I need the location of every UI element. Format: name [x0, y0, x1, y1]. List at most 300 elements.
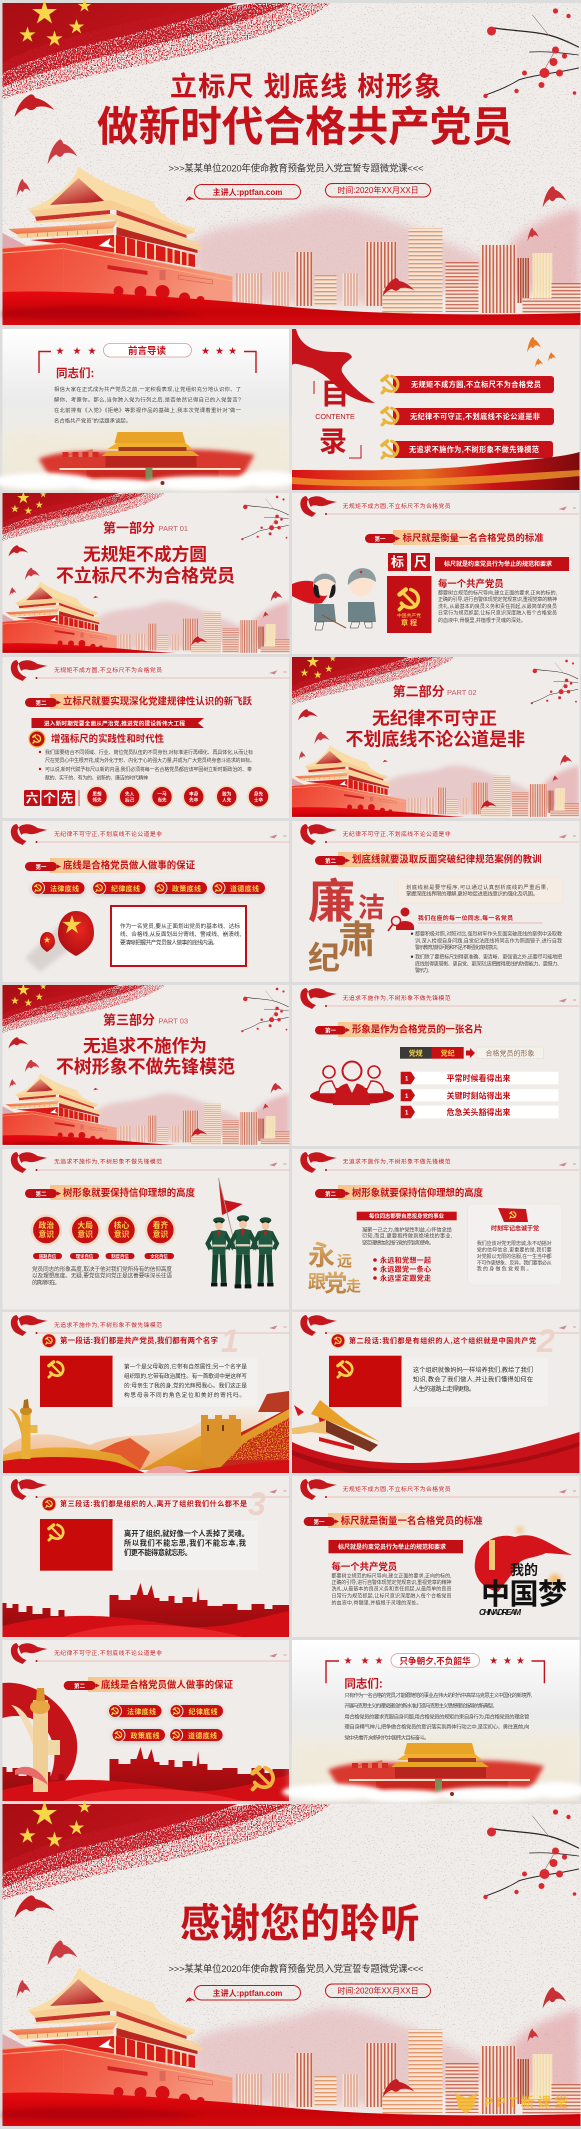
body text: 开展马克思主义的理党建设的新水准,打造马克思主义思想理论指导的新典型。	[344, 1702, 497, 1710]
definition bar: 标尺就是约束党员行为举止的规范和要求	[338, 1543, 446, 1551]
contents item 1: 无规矩不成方圆,不立标尺不为合格党员	[411, 380, 541, 389]
presenter pill	[194, 184, 300, 199]
standard row 2: 1	[405, 1094, 409, 1100]
bullet text: 都要积极对照,对照对比,强烈树牢作头反面突破底线的案例中汲取教	[415, 931, 562, 938]
salutation: 同志们:	[56, 366, 94, 380]
big calligraphic words: 洁	[358, 893, 385, 923]
body text	[54, 385, 242, 424]
text card: 知识,教会了我们做人,并让我们懂得如何在	[413, 1375, 533, 1383]
party rule boxes and arrow: 党纪	[441, 1048, 455, 1058]
thank you title: 感谢您的聆听	[180, 1902, 420, 1946]
text card: 这个组织就像妈妈一样培养我们,教给了我们	[413, 1366, 533, 1374]
palace illustration	[0, 421, 298, 491]
subheading	[418, 914, 542, 923]
cover art	[292, 655, 579, 824]
title line 2: 做新时代合格共产党员	[97, 103, 513, 150]
section heading	[25, 858, 200, 873]
section heading	[315, 1022, 488, 1037]
slide header	[300, 496, 579, 517]
text box	[111, 906, 246, 966]
salutation: 同志们:	[344, 1676, 383, 1690]
side card: 我们应该对党无限忠诚,永不动摇对	[477, 1240, 552, 1247]
six first label: 六	[26, 790, 38, 806]
panel: lessons from cases	[292, 821, 580, 982]
four confidence pills	[33, 1253, 174, 1260]
party rule boxes and arrow: 合格党员的形象	[486, 1048, 534, 1058]
part label	[103, 520, 188, 536]
corner brackets	[39, 352, 256, 373]
part title: 无追求不施作为	[83, 1035, 207, 1056]
heading pill: 只争朝夕,不负韶华	[399, 1655, 471, 1666]
section heading: 形象是作为合格党员的一张名片	[352, 1024, 483, 1034]
ribbon	[292, 452, 580, 490]
palace illustration	[282, 1732, 581, 1802]
six circles: 领先	[92, 796, 102, 804]
party flag	[40, 1356, 113, 1407]
date pill: 时间:2020年XX月XX日	[337, 185, 419, 195]
part title: 无纪律不可守正	[372, 708, 497, 728]
six circles: 一马	[157, 790, 167, 798]
four confidence pills: 道路自信	[39, 1253, 57, 1260]
section heading	[304, 1513, 483, 1528]
note box	[398, 877, 563, 903]
body text: 用合格党员的要求克服自身问题,用合格党员的规矩约束自身行为,用合格党员的理念管	[344, 1712, 529, 1720]
stars	[344, 1657, 524, 1664]
part label: PART 02	[447, 688, 477, 697]
standard row 3: 1	[405, 1110, 409, 1116]
six circles	[86, 786, 269, 807]
panel: part three cover	[2, 983, 289, 1152]
part title	[56, 1035, 235, 1077]
gold slogan: 跟	[308, 1272, 326, 1292]
text box: 作为一名党员,要从正面划出党员的基本线、达标	[120, 922, 240, 930]
part title: 不立标尺不为合格党员	[56, 565, 235, 586]
body text: 坚定理想信念,践行党的宗旨和使命。	[362, 1238, 434, 1246]
china dream artwork: 中国梦	[481, 1578, 567, 1611]
panel: title cover	[2, 0, 581, 325]
bullet text: 献的、实干的、有为的、创新的、廉洁的时代精神	[45, 774, 148, 781]
label boxes: 标	[391, 554, 404, 570]
panel: bottom line pills with huabiao	[2, 1640, 290, 1801]
text card	[402, 1358, 548, 1407]
standard row 2: 关键时刻站得出来	[446, 1090, 510, 1100]
text card: 组织取的,它带有政治属性。有一首歌词中是这样写	[124, 1372, 247, 1380]
part label	[393, 684, 477, 699]
part label: 第二部分	[393, 684, 445, 699]
slide header	[11, 1152, 289, 1173]
definition bar	[435, 557, 569, 571]
section heading: 划底线就要汲取反面突破纪律规范案例的教训	[352, 854, 542, 864]
party constitution book: 章 程	[401, 618, 417, 627]
cover art	[2, 983, 289, 1152]
bottom line pills: 法律底线	[50, 884, 79, 893]
part label: PART 03	[158, 1016, 188, 1026]
note box: 掌握深底线界限的理解,更好地促进底线意识的强化及巩固。	[406, 890, 538, 898]
section heading: 底线是合格党员做人做事的保证	[101, 1679, 234, 1690]
body text: 日常行为规范抓起,让标尺意识深度融入每个合格党员	[438, 610, 557, 617]
section heading: 树形象就要保持信仰理想的高度	[63, 1187, 196, 1198]
panel: thank you cover	[2, 1800, 581, 2126]
body text	[332, 1572, 452, 1607]
part label: 第一部分	[103, 520, 155, 536]
presenter pill: 主讲人:pptfan.com	[213, 187, 282, 197]
people icon	[310, 1062, 394, 1105]
statement heading	[42, 1497, 247, 1511]
contents item 3	[382, 441, 553, 458]
contents item 1	[382, 376, 554, 393]
statement heading: 第一段话:我们都是共产党员,我们都有两个名字	[60, 1336, 218, 1345]
bullet text: 警示教育,放松问题和不足,不断强化底线意识。	[415, 944, 501, 951]
definition bar: 标尺就是约束党员行为举止的规范和要求	[444, 560, 552, 568]
part title	[56, 544, 235, 586]
six circles: 思想	[92, 790, 102, 796]
section heading: 第二	[35, 1190, 47, 1198]
slide header: 无规矩不成方圆,不立标尺不为合格党员	[343, 502, 451, 510]
six circles: 率身	[189, 790, 199, 798]
emblem	[29, 731, 45, 747]
slide header: 无追求不施作为,不树形象不做先锋模范	[343, 1158, 451, 1166]
bottom line pills: 法律底线	[127, 1707, 156, 1716]
commitment list: 永远跟党一条心	[380, 1264, 431, 1274]
bottom line pills: 纪律底线	[111, 884, 140, 893]
text card: 构思母亲不同的角色定位和美好的寄托吗。	[124, 1391, 245, 1399]
bullet text: 训,深入检视自身问题,自觉纪法底线将同志作为照面镜子,进行自我	[415, 937, 562, 944]
section heading	[25, 694, 253, 709]
body text: 都要树立规范的标尺导向,建立正面的要求,正向的标的,	[332, 1572, 452, 1580]
party flag	[329, 1356, 402, 1407]
six circles: 士卒	[254, 796, 263, 804]
cover illustration: palace, birds, city skyline	[2, 94, 580, 325]
section heading: 第一	[374, 535, 386, 543]
definition bar	[328, 1540, 463, 1553]
section heading: 第一	[313, 1518, 325, 1526]
statement heading	[331, 1334, 536, 1348]
part title	[346, 708, 525, 750]
section heading: 立标尺就要实现深化党建规律性认识的新飞跃	[63, 696, 253, 706]
gold slogan	[308, 1241, 361, 1296]
four consciousness circles: 意识	[39, 1229, 54, 1239]
gold slogan: 远	[337, 1253, 352, 1270]
ribbon title: 每位同志都要自愿投身党的事业	[369, 1212, 445, 1220]
corner brackets	[326, 1661, 544, 1683]
four consciousness circles: 意识	[77, 1229, 93, 1239]
slide header	[300, 1152, 579, 1173]
six circles: 当先	[157, 796, 167, 804]
panel: part two cover	[292, 655, 580, 824]
bird icons	[527, 337, 556, 368]
section heading	[315, 1185, 488, 1200]
bottom line pills: 政策底线	[172, 884, 201, 893]
four consciousness circles: 看齐	[153, 1220, 168, 1230]
big numeral: 2	[536, 1323, 555, 1359]
four confidence pills: 理论自信	[76, 1253, 94, 1260]
subtitle: >>>某某单位2020年使命教育预备党员入党宣誓专题微党课<<<	[168, 1963, 424, 1974]
four consciousness circles: 意识	[114, 1229, 129, 1239]
slide header	[11, 1479, 289, 1500]
slide header: 无追求不施作为,不树形象不做先锋模范	[343, 994, 451, 1002]
body text: 正确的引导,进行自警体现党定党规意识,重视党章的精神	[438, 596, 557, 603]
body text: 正确的引导,进行自警体现党定党规意识,重视党章的精神	[332, 1579, 452, 1586]
four consciousness circles: 政治	[39, 1220, 54, 1230]
body text: 衍知,而且,更要抱持敢到绝境找的事业,	[362, 1232, 452, 1240]
body text	[362, 1225, 452, 1246]
section heading: 标尺就是衡量一名合格党员的标准	[403, 532, 544, 543]
bullet text: 我们需要结合不同领域、行业、岗位党员队伍的不同身份,对标准进行再细化、再具体化,从而让标	[45, 749, 253, 756]
slide header: 无追求不施作为,不树形象不做先锋模范	[54, 1158, 162, 1166]
slide header	[300, 1479, 579, 1500]
part label: 第三部分	[103, 1012, 155, 1028]
slide header: 无规矩不成方圆,不立标尺不为合格党员	[54, 666, 162, 674]
gold slogan: 永	[308, 1241, 335, 1271]
section heading: 第二	[325, 857, 336, 865]
honor guard soldiers	[205, 1178, 279, 1288]
body text: 的血液中,骨髓里,并植根于灵魂的深处。	[438, 617, 526, 624]
party constitution book: 中国共产党	[397, 612, 421, 619]
text card	[113, 1521, 258, 1570]
contents item 2	[382, 408, 554, 425]
contents title: 录	[319, 426, 347, 457]
commitment list: 永远和党想一起	[380, 1256, 431, 1264]
big calligraphic words: 肃	[338, 920, 376, 962]
section heading	[365, 530, 544, 545]
contents item 3: 无追求不施作为,不树形象不做先锋模范	[409, 445, 539, 454]
panel: closing message	[282, 1640, 581, 1802]
slide header	[11, 1315, 289, 1336]
gold emblem	[253, 1768, 273, 1789]
part title: 不树形象不做先锋模范	[56, 1057, 235, 1077]
section heading: 第一	[325, 1026, 336, 1034]
text card: 人生的道路上走得更稳。	[413, 1385, 475, 1393]
bottom line pills	[32, 882, 265, 895]
china dream artwork: 我的	[510, 1562, 538, 1578]
standard row 1	[401, 1072, 558, 1084]
section heading: 底线是合格党员做人做事的保证	[63, 860, 196, 870]
standard row 3	[401, 1106, 558, 1118]
panel: foreword	[0, 329, 298, 491]
four consciousness circles: 意识	[153, 1229, 168, 1239]
contents item 2: 无纪律不可守正,不划底线不论公道是非	[410, 412, 540, 421]
panel: third statement	[2, 1476, 290, 1637]
bullet text: 可以说,新时代赋予标尺以新的内涵,我们必须将每一名合格党员都应该牢固树立新时期政治的、奉	[45, 766, 252, 773]
body text	[32, 1265, 172, 1287]
bullet text	[411, 931, 562, 974]
statement heading: 第三段话:我们都是组织的人,离开了组织我们什么都不是	[60, 1499, 247, 1508]
slide header: 无追求不施作为,不树形象不做先锋模范	[54, 1321, 162, 1329]
magnifier person icon	[388, 908, 414, 931]
body text: 解你、考察你。那么,当你跨入党为行列之后,是否依然记得自己的入党誓言?	[54, 395, 241, 403]
bottom line pills: 纪律底线	[188, 1707, 218, 1716]
section heading	[25, 1185, 200, 1200]
date pill	[326, 1984, 430, 1998]
bottom line pills	[108, 1704, 223, 1742]
section heading	[315, 852, 542, 867]
contents title: 目	[320, 379, 350, 411]
standard row 2	[401, 1089, 558, 1101]
body text: 的真谛何在。	[32, 1279, 60, 1287]
panel: second statement	[292, 1312, 580, 1473]
subtitle: >>>某某单位2020年使命教育预备党员入党宣誓专题微党课<<<	[168, 162, 424, 174]
bullet text: 警示力。	[415, 967, 432, 974]
cover illustration: flag banner and plum branch	[2, 1800, 578, 1900]
part title: 不划底线不论公道是非	[346, 728, 525, 750]
party rule boxes and arrow	[400, 1047, 544, 1059]
ribbon title	[357, 1212, 457, 1220]
gold slogan: 党	[324, 1270, 347, 1296]
label boxes	[388, 553, 430, 571]
presenter pill: 主讲人:pptfan.com	[213, 1988, 282, 1998]
section heading: 第二	[325, 1190, 336, 1198]
section heading: 标尺就是衡量一名合格党员的标准	[341, 1515, 483, 1526]
body text: 的血液中,骨髓里,并植根于灵魂的深处。	[332, 1600, 422, 1607]
red scarf	[292, 329, 375, 403]
ribbon banner: 进入新时期党要全面从严治党,推进党的建设新伟大工程	[44, 720, 185, 728]
text box: 线、合格线,从反面划出分寄线、警戒线、崩溃线,	[120, 930, 241, 938]
slide header: 无纪律不可守正,不划底线不论公道是非	[54, 1649, 162, 1657]
date pill: 时间:2020年XX月XX日	[337, 1986, 419, 1996]
panel: contents	[292, 329, 580, 490]
heading pill	[391, 1654, 480, 1667]
big calligraphic words: 纪	[308, 940, 340, 976]
bottom line pills: 道德底线	[230, 884, 259, 893]
four consciousness circles: 核心	[114, 1220, 129, 1230]
slide header: 无纪律不可守正,不划底线不论公道是非	[54, 830, 162, 838]
body text: 相信大家在正式成为共产党员之前,一定积极表现,让党组织充分地认识你、了	[54, 385, 241, 393]
slide header	[300, 988, 579, 1009]
label boxes: 尺	[414, 554, 427, 570]
body text: 理自身精气神儿,把争做合格党员的意识落实到具体行动之中,坚定初心、勇往直前,向	[344, 1723, 529, 1731]
section heading: 第二	[74, 1682, 85, 1690]
six circles: 人先	[222, 796, 232, 804]
stars	[56, 347, 236, 354]
contents title	[314, 379, 361, 458]
commitment list	[373, 1256, 431, 1282]
body text: 凝聚一己之力,维护党性利益,心怀信念给	[362, 1225, 452, 1233]
slide header	[300, 1315, 579, 1336]
body text	[438, 590, 557, 624]
four confidence pills: 文化自信	[150, 1253, 168, 1260]
bullet text	[39, 749, 255, 781]
contents title: CONTENTE	[315, 412, 355, 421]
body text: 在北前排有《入党》《拒绝》等影视作品的基础上,我本次党课着重针对“做一	[54, 406, 242, 414]
text card: 们更不能得意就忘形。	[124, 1548, 192, 1557]
big calligraphic words	[308, 875, 385, 976]
text card: 的:母亲生了我的身,党的光辉照我心。我们这正是	[124, 1381, 247, 1389]
section heading: 树形象就要保持信仰理想的高度	[352, 1187, 484, 1198]
huabiao column	[11, 1688, 60, 1792]
text card: 所以我们不能忘思,我们不能忘本,我	[124, 1538, 247, 1548]
section heading: 第二	[35, 699, 47, 707]
big calligraphic words: 廉	[308, 875, 355, 928]
red skyline	[2, 1583, 289, 1637]
body text: 党员同志的形象高度,取决于他对我们党所持有的信仰高度	[32, 1265, 172, 1273]
section heading: 第一	[35, 863, 47, 871]
body text: 洗礼,从最基本的良员义务和责任抓起,从最简单的良员	[438, 603, 557, 610]
big numeral: 1	[221, 1323, 239, 1359]
watermark logo	[455, 2093, 568, 2114]
subheading: 每一个共产党员	[332, 1561, 397, 1572]
text card	[113, 1358, 257, 1407]
bullet text: 我们除了要把标尺划得更准确、更清晰、更强语之外,还要尽可能地把	[415, 954, 562, 961]
note box: 划底线就是要守程序,可以通过认真剖析底线的严重后果,	[406, 883, 548, 891]
six circles: 先人	[125, 790, 135, 798]
standard row 1: 平常时候看得出来	[446, 1073, 510, 1083]
side card: 不可作更想象、反异。我们要事必从	[477, 1259, 552, 1266]
cartoon children	[292, 568, 376, 630]
part title: 无规矩不成方圆	[83, 544, 207, 564]
cover illustration: palace, birds, city skyline	[2, 1895, 580, 2126]
panel: ruler new leap	[2, 657, 290, 818]
six circles: 后己	[125, 796, 135, 804]
six first label: 先	[61, 790, 73, 806]
text card: 第一个是父母取的,它带有自然属性;另一个名字是	[124, 1363, 247, 1371]
party constitution book	[387, 576, 432, 633]
slide header	[11, 660, 289, 681]
body text	[344, 1691, 532, 1741]
body text: 日常行为规范抓起,让标尺意识深度融入每个合格党员	[332, 1593, 452, 1600]
panel: faith and ideals consciousness	[2, 1149, 290, 1310]
slide header	[300, 824, 579, 845]
red crescent	[2, 1683, 77, 1795]
heading pill	[104, 344, 192, 357]
body text: 党中央看齐,向新时代中国伟大目标奋斗。	[344, 1733, 429, 1741]
date pill	[326, 184, 430, 197]
subheading: 我们在座的每一位同志,每一名党员	[418, 914, 513, 922]
four consciousness circles: 大局	[77, 1220, 93, 1230]
statement heading	[42, 1334, 218, 1348]
part label	[103, 1012, 188, 1028]
standard row 3: 危急关头豁得出来	[446, 1107, 510, 1117]
side card: 党的信仰信念,更重要的是,我们要	[477, 1247, 552, 1254]
slide header	[11, 1643, 289, 1664]
body text: 只有作为一名合格的党员,才能跟随党的事业,在伟大的时代中高举马克思主义中国化的新境界,	[344, 1691, 532, 1699]
subheading: 增强标尺的实践性和时代性	[51, 733, 165, 744]
six first label	[24, 790, 79, 806]
side card: 对党报以无限的信服,在一生当中都	[477, 1253, 552, 1260]
party flag	[40, 1519, 113, 1571]
six circles: 先卒	[189, 796, 199, 804]
four consciousness circles	[32, 1216, 175, 1244]
slide header: 无规矩不成方圆,不立标尺不为合格党员	[343, 1485, 451, 1493]
body text: 洗礼,从最基本的良员义务和责任抓起,从最简单的良员	[332, 1586, 452, 1593]
panel: china dream	[292, 1476, 580, 1637]
commitment list: 永远坚定跟党走	[380, 1274, 431, 1282]
china dream artwork	[475, 1526, 572, 1617]
panel: image as name card	[292, 985, 580, 1146]
panel: first statement	[2, 1312, 290, 1473]
gold slogan: 走	[346, 1278, 361, 1295]
slide header	[11, 824, 289, 845]
bottom line pills: 政策底线	[130, 1731, 160, 1740]
cover illustration: flag banner and plum branch	[2, 0, 578, 99]
panel: part one cover	[2, 491, 289, 660]
heading pill: 前言导读	[128, 345, 166, 357]
subheading: 每一个共产党员	[438, 578, 504, 589]
statement heading: 第二段话:我们都是有组织的人,这个组织就是中国共产党	[349, 1336, 536, 1345]
standard row 1: 1	[405, 1076, 409, 1082]
side card	[467, 1204, 562, 1285]
panel: ruler standard	[292, 493, 580, 654]
ribbon banner	[32, 718, 204, 728]
cover art	[2, 491, 289, 660]
bottom line pills: 道德底线	[188, 1731, 217, 1740]
side card: 我的身做危党规则。	[477, 1265, 532, 1272]
six circles: 身先	[254, 790, 263, 798]
body text: 名合格共产党员”的话题承谈起。	[54, 416, 131, 424]
panel: forever follow the party	[292, 1149, 580, 1310]
watermark logo: PPT新课堂	[484, 2094, 568, 2110]
bullet text: 尺在党员心中生根开花,成为外化于形、内化于心的强大力量,并成为广大党员终身奋斗追求的目标。	[45, 757, 255, 764]
text card: 离开了组织,就好像一个人丢掉了灵魂。	[124, 1529, 249, 1538]
